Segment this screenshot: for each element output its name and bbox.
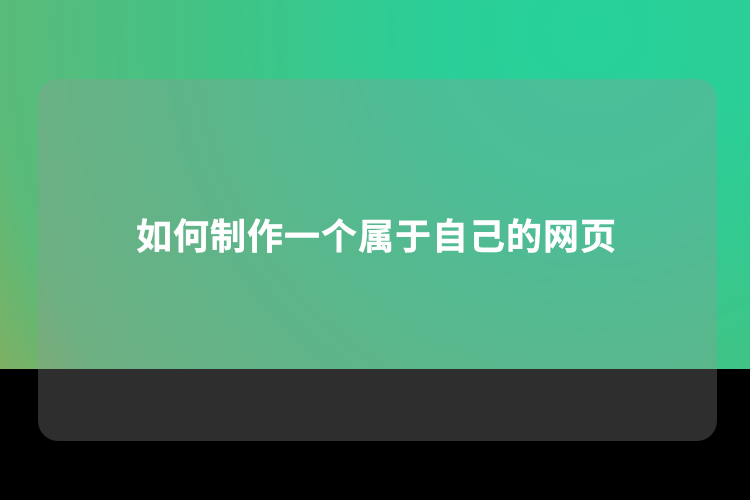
background gradient xyxy=(0,0,750,369)
title: 如何制作一个属于自己的网页 xyxy=(136,216,617,257)
panel: translucent card xyxy=(38,79,717,441)
